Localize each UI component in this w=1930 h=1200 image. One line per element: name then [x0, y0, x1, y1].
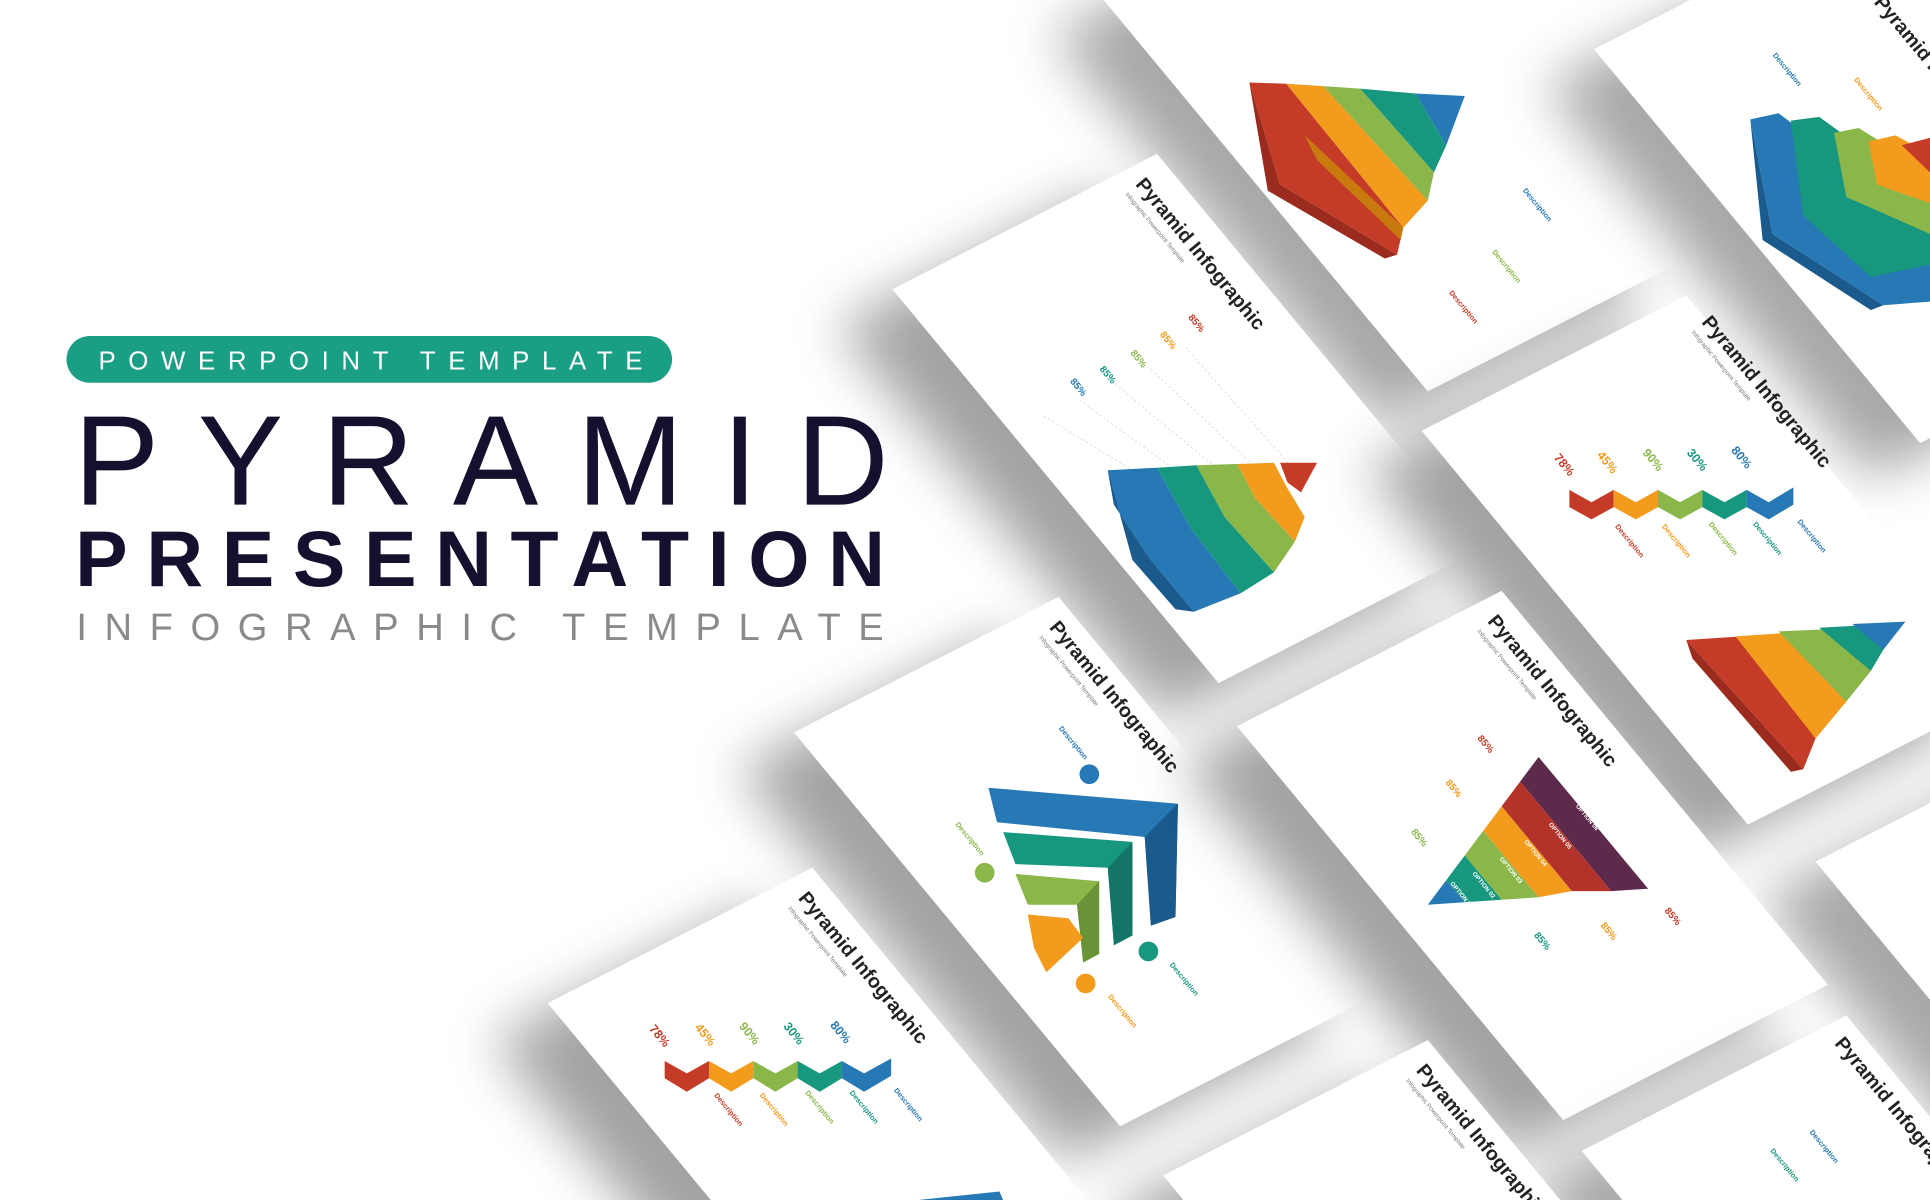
percentages E: 85%: [1408, 827, 1429, 849]
slide: B arched pyramid: [837, 154, 1483, 720]
title: PYRAMID: PYRAMID: [74, 390, 889, 533]
slide: F funnel pyramid: [739, 597, 1385, 1163]
title B: Infographic Powerpoint Template: [1123, 191, 1186, 265]
percentages B: 85%: [1157, 330, 1178, 352]
option bands E: OPTION 02: [1471, 871, 1497, 900]
title D: Infographic Powerpoint Template: [1690, 329, 1752, 403]
title F: Infographic Powerpoint Template: [1037, 634, 1100, 708]
percentages D: 90%: [1640, 446, 1666, 474]
slide: D stair pyramid with ribbons: Description: [1796, 517, 1829, 555]
option bands E: OPTION 06: [1574, 803, 1600, 833]
title F: Pyramid Infographic: [1045, 617, 1183, 778]
percentages B: 85%: [1067, 376, 1088, 399]
percentages D: 78%: [1551, 451, 1578, 479]
nested pyramid C: [1750, 113, 1930, 310]
percentages G: 90%: [736, 1020, 763, 1047]
title D: Pyramid Infographic: [1697, 312, 1836, 472]
option bands E: OPTION 01: [1448, 881, 1475, 910]
slide: D stair pyramid with ribbons: Description: [1613, 522, 1646, 560]
slide: E option pyramid: [1182, 591, 1828, 1157]
option bands E: OPTION 05: [1547, 821, 1573, 851]
slide: F funnel pyramid: Description: [1168, 961, 1201, 998]
title B: Pyramid Infographic: [1131, 174, 1269, 335]
percentages E: [1408, 733, 1683, 953]
slide: G ribbon slide bottom left: Description: [892, 1086, 925, 1123]
slide: G ribbon slide bottom left: Description: [712, 1091, 745, 1128]
slide: G ribbon slide bottom left: Description: [848, 1089, 881, 1126]
descriptions A: Description: [1447, 288, 1480, 326]
percentages G: 30%: [781, 1020, 807, 1047]
title E: Infographic Powerpoint Template: [1476, 628, 1538, 702]
slide: F funnel pyramid: Description: [1106, 993, 1139, 1030]
pill: POWERPOINT TEMPLATE: POWERPOINT TEMPLATE: [98, 347, 643, 375]
option bands E: OPTION 04: [1522, 839, 1548, 868]
slide: H bottom middle: [1108, 1040, 1754, 1200]
slide: F funnel pyramid: Description: [1057, 724, 1090, 762]
percentages E: 85%: [1531, 930, 1553, 953]
percentages E: 85%: [1443, 778, 1464, 800]
percentages D: [1551, 443, 1755, 479]
ribbon chevrons G: [665, 1059, 891, 1092]
title G: Infographic Powerpoint Template: [786, 905, 849, 979]
descriptions A: Description: [1490, 248, 1523, 285]
percentages G: 78%: [646, 1022, 673, 1050]
descriptions A: Description: [1521, 186, 1554, 224]
pill: POWERPOINT TEMPLATE: [66, 336, 672, 383]
slide: A top pyramid slide: [1052, 0, 1692, 428]
percentages G: 45%: [692, 1021, 718, 1049]
slide: C top-right nested pyramid: Description: [1852, 76, 1885, 113]
arched pyramid B: [1108, 463, 1317, 612]
subtitle: INFOGRAPHIC TEMPLATE: INFOGRAPHIC TEMPLATE: [76, 606, 884, 649]
slide: G ribbon slide bottom left: [492, 868, 1139, 1200]
percentages B: 85%: [1128, 348, 1149, 371]
slide: I bottom right: Description: [1808, 1128, 1841, 1165]
icons F: [975, 764, 1158, 993]
slide: D stair pyramid with ribbons: [1366, 295, 1930, 862]
title: PRESENTATION: PRESENTATION: [75, 515, 885, 603]
pyramid graphic A: [1249, 82, 1465, 258]
slide: D stair pyramid with ribbons: Description: [1751, 520, 1784, 557]
funnel graphic F: [988, 788, 1178, 972]
percentages E: 85%: [1662, 906, 1683, 928]
slide: D stair pyramid with ribbons: Description: [1660, 522, 1693, 560]
slide: C top-right nested pyramid: Description: [1771, 51, 1804, 88]
title E: Pyramid Infographic: [1483, 611, 1621, 771]
percentages G: [646, 1018, 854, 1050]
stair pyramid D: [1686, 622, 1905, 772]
percentages B: 85%: [1185, 312, 1207, 335]
title G: Pyramid Infographic: [794, 888, 932, 1048]
percentages E: 85%: [1598, 921, 1619, 943]
percentages D: 45%: [1594, 448, 1621, 476]
slide: C top-right nested pyramid: [1545, 0, 1930, 480]
percentages D: 30%: [1684, 446, 1710, 474]
percentages B: [1067, 312, 1207, 399]
slide: I bottom right: [1526, 1015, 1930, 1200]
slide: J right edge: [1760, 726, 1930, 1200]
option bands E: OPTION 03: [1498, 856, 1524, 886]
slide: G ribbon slide bottom left: Description: [758, 1091, 791, 1128]
slide: I bottom right: Description: [1768, 1146, 1802, 1184]
descriptions A: [1447, 186, 1554, 326]
percentages G: 80%: [827, 1018, 854, 1046]
slide: D stair pyramid with ribbons: Description: [1707, 520, 1740, 557]
ribbon chevrons D: [1569, 487, 1793, 519]
slide: G ribbon slide bottom left: Description: [803, 1089, 837, 1126]
slide: H bottom middle: Infographic Powerpoint Template: [1404, 1078, 1467, 1151]
percentages B: 85%: [1097, 364, 1118, 387]
slide: F funnel pyramid: Description: [954, 820, 987, 858]
percentages E: 85%: [1475, 733, 1496, 756]
option bands E: [1428, 757, 1648, 910]
percentages D: 80%: [1728, 443, 1755, 471]
